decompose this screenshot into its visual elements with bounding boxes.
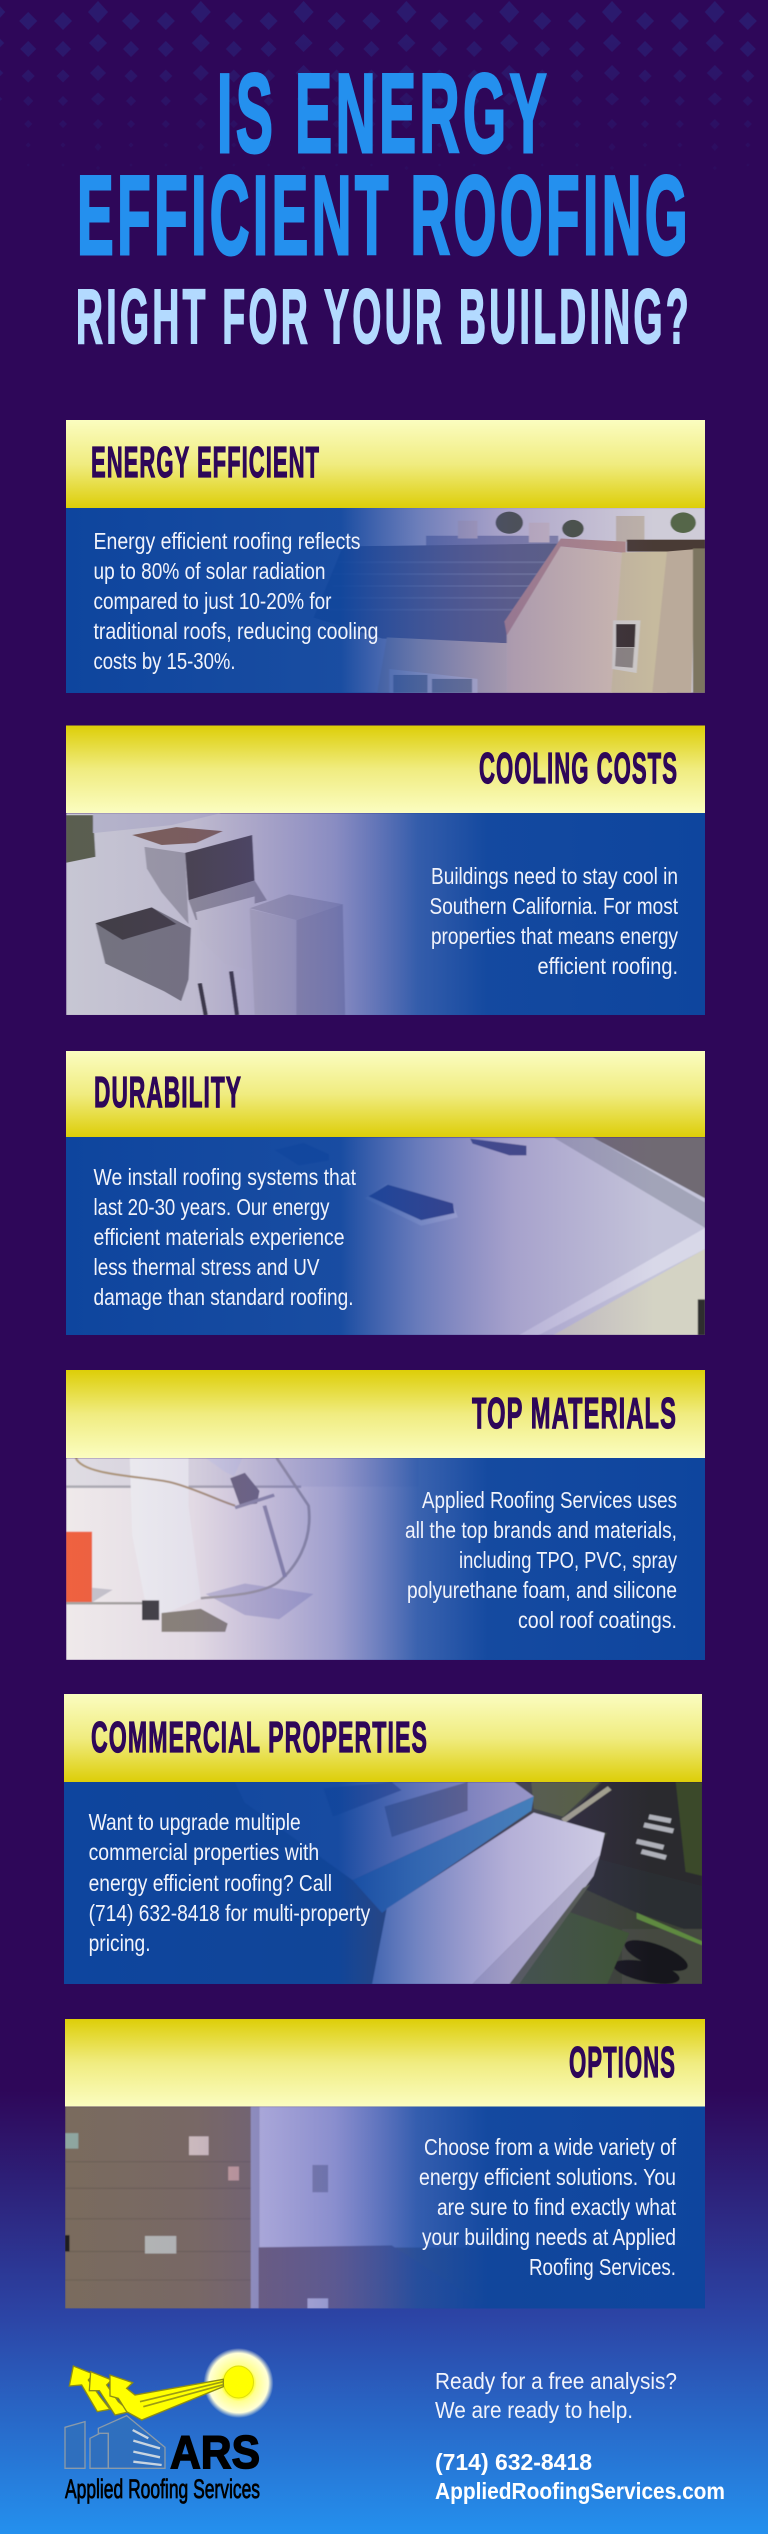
- heading: COMMERCIAL PROPERTIES: [91, 1713, 428, 1762]
- blue gradient overlay: [146, 2106, 705, 2308]
- photo: aerial commercial building: [64, 1782, 705, 1989]
- body text: your building needs at Applied: [422, 2224, 676, 2250]
- body text: all the top brands and materials,: [405, 1517, 677, 1543]
- body text: efficient roofing.: [538, 953, 678, 979]
- panel: commercial properties: [64, 1694, 705, 1989]
- panel: top materials: [66, 1370, 705, 1660]
- body text: [405, 1487, 677, 1633]
- body text: up to 80% of solar radiation: [94, 558, 326, 584]
- body text: [94, 528, 378, 674]
- header band: [66, 420, 705, 508]
- contact text: We are ready to help.: [435, 2397, 633, 2423]
- panel: energy efficient: [66, 420, 705, 693]
- photo: rooftop ductwork: [66, 813, 705, 1015]
- body text: (714) 632-8418 for multi-property: [89, 1900, 371, 1926]
- contact text: [435, 2368, 725, 2504]
- contact text: Ready for a free analysis?: [435, 2368, 677, 2394]
- icon: yellow arrows: [69, 2366, 223, 2420]
- panel: options: [65, 2019, 705, 2309]
- heading: DURABILITY: [94, 1068, 242, 1117]
- logo lettering ARS: ARS: [170, 2426, 260, 2478]
- body text: traditional roofs, reducing cooling: [94, 618, 378, 644]
- header band: [66, 1370, 705, 1458]
- body text: commercial properties with: [89, 1839, 319, 1865]
- contact text: (714) 632-8418: [435, 2449, 592, 2475]
- header band: [66, 1051, 705, 1137]
- body text: [430, 863, 679, 979]
- photo: worker spraying roof coating: [66, 1458, 705, 1660]
- body text: energy efficient roofing? Call: [89, 1870, 332, 1896]
- body text: compared to just 10-20% for: [94, 588, 332, 614]
- contact text: AppliedRoofingServices.com: [435, 2478, 725, 2504]
- body text: including TPO, PVC, spray: [459, 1547, 677, 1573]
- body text: Roofing Services.: [529, 2254, 676, 2280]
- title: [76, 51, 692, 360]
- blue gradient overlay: [66, 1458, 705, 1660]
- body text: energy efficient solutions. You: [419, 2164, 676, 2190]
- body text: Southern California. For most: [430, 893, 679, 919]
- body text: We install roofing systems that: [94, 1164, 357, 1190]
- photo: coated flat roof with skylights: [66, 1137, 705, 1335]
- photo: overhead view of roofs: [65, 2106, 705, 2309]
- body text: pricing.: [89, 1930, 151, 1956]
- header band: [65, 2019, 705, 2106]
- logo company name: Applied Roofing Services: [65, 2474, 260, 2504]
- body text: [419, 2134, 677, 2280]
- body text: [94, 1164, 357, 1310]
- header band: [64, 1694, 702, 1782]
- body text: Want to upgrade multiple: [89, 1809, 301, 1835]
- panel: durability: [66, 1051, 705, 1335]
- body text: damage than standard roofing.: [94, 1284, 354, 1310]
- body text: Choose from a wide variety of: [424, 2134, 677, 2160]
- body text: costs by 15-30%.: [94, 648, 236, 674]
- body text: polyurethane foam, and silicone: [407, 1577, 677, 1603]
- icon: sun: [204, 2348, 274, 2418]
- background diamond pattern: [0, 0, 768, 172]
- icon: buildings: [65, 2416, 165, 2468]
- body text: are sure to find exactly what: [437, 2194, 677, 2220]
- heading: ENERGY EFFICIENT: [91, 438, 320, 487]
- header band: [66, 726, 705, 813]
- blue gradient overlay: [66, 508, 622, 693]
- body text: Energy efficient roofing reflects: [94, 528, 360, 554]
- body text: cool roof coatings.: [518, 1607, 677, 1633]
- body text: [89, 1809, 371, 1956]
- body text: properties that means energy: [431, 923, 678, 949]
- blue gradient overlay: [66, 813, 705, 1015]
- photo: tile roof and stucco wall: [66, 508, 705, 693]
- body text: last 20-30 years. Our energy: [94, 1194, 330, 1220]
- body text: efficient materials experience: [94, 1224, 344, 1250]
- blue gradient overlay: [66, 1137, 626, 1335]
- body text: Buildings need to stay cool in: [431, 863, 678, 889]
- body text: Applied Roofing Services uses: [422, 1487, 677, 1513]
- blue gradient overlay: [64, 1782, 622, 1984]
- logo: Applied Roofing Services: [65, 2348, 274, 2504]
- body text: less thermal stress and UV: [94, 1254, 320, 1280]
- panel: cooling costs: [66, 726, 705, 1015]
